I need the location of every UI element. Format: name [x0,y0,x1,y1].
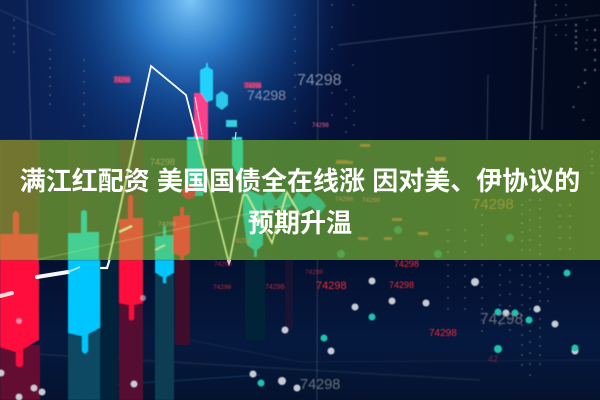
title line 2: 预期升温 [248,208,352,238]
candle: cyan upper [200,63,213,102]
labels: red numbers: 74298 [429,328,457,339]
grey dots [0,278,578,400]
trend line above and below band [0,66,236,296]
labels: pink small numbers: 74298 [114,78,131,84]
band candle: green tall [187,140,203,196]
candle: cyan hexagon [216,91,228,110]
content seen through the band [0,139,593,261]
red blob in band [182,185,196,199]
labels: pink small numbers [114,78,329,129]
labels: red numbers [213,259,498,364]
band dotted columns [448,152,592,255]
band trend line [36,139,301,261]
candle columns: reflections under the candles [0,260,293,400]
teal dots [258,270,578,386]
band candle: green lower [243,168,263,257]
labels: amber numbers in band: 74298 [232,238,252,245]
band candle: orange right [173,207,190,260]
candle: red middle [119,260,143,320]
green title band [0,140,600,260]
labels: amber numbers in band: 74298 [362,197,380,204]
labels: grey numbers [247,72,523,393]
candle: red left [0,260,39,367]
labels: amber numbers in band: 74298 [158,221,176,228]
pink tags [114,76,261,88]
labels: amber numbers in band: 74298 [472,196,514,213]
labels: red numbers: 74298 [214,261,232,268]
labels: grey numbers: 74298 [297,72,342,89]
title line 1: 满江红配资 美国国债全在线涨 因对美、伊协议的 [20,166,580,196]
band amber tags [336,144,446,240]
labels: amber numbers in band: 74298 [150,157,175,167]
band candle: green small [155,226,174,260]
band candle: green upper right [232,140,243,175]
labels: red numbers: 74298 [213,284,231,291]
labels: red numbers: 74298 [316,280,347,292]
labels: amber numbers in band [150,157,514,245]
candlesticks below and above the band [0,63,293,400]
labels: red numbers: 74298 [389,280,414,290]
labels: pink small numbers: 74298 [312,123,329,129]
labels: grey numbers: 74298 [480,311,523,328]
band candle: orange left [0,211,38,260]
band glows [337,226,514,258]
labels: red numbers: 42 [488,354,498,364]
number labels [114,72,523,393]
band candles: green cluster [262,190,326,214]
labels: red numbers: 74298 [265,284,285,291]
candle: cyan small block [226,120,237,127]
dots [0,270,578,400]
candle: cyan [68,260,100,354]
band candle: green [68,210,99,260]
candle: pink upper [194,93,208,140]
candle: cyan small [155,260,174,283]
labels: amber numbers in band: 74298 [335,196,353,203]
labels: grey numbers: 74298 [247,87,286,103]
band candle: orange middle [119,195,143,260]
band tint columns [0,140,208,260]
title [20,166,580,238]
labels: pink small numbers: 74298 [245,84,262,90]
labels: red numbers: 74298 [394,259,419,269]
labels: red numbers: 74298 [305,269,323,276]
labels: grey numbers: 74298 [300,377,340,393]
candle: cyan tops above band [187,137,242,140]
